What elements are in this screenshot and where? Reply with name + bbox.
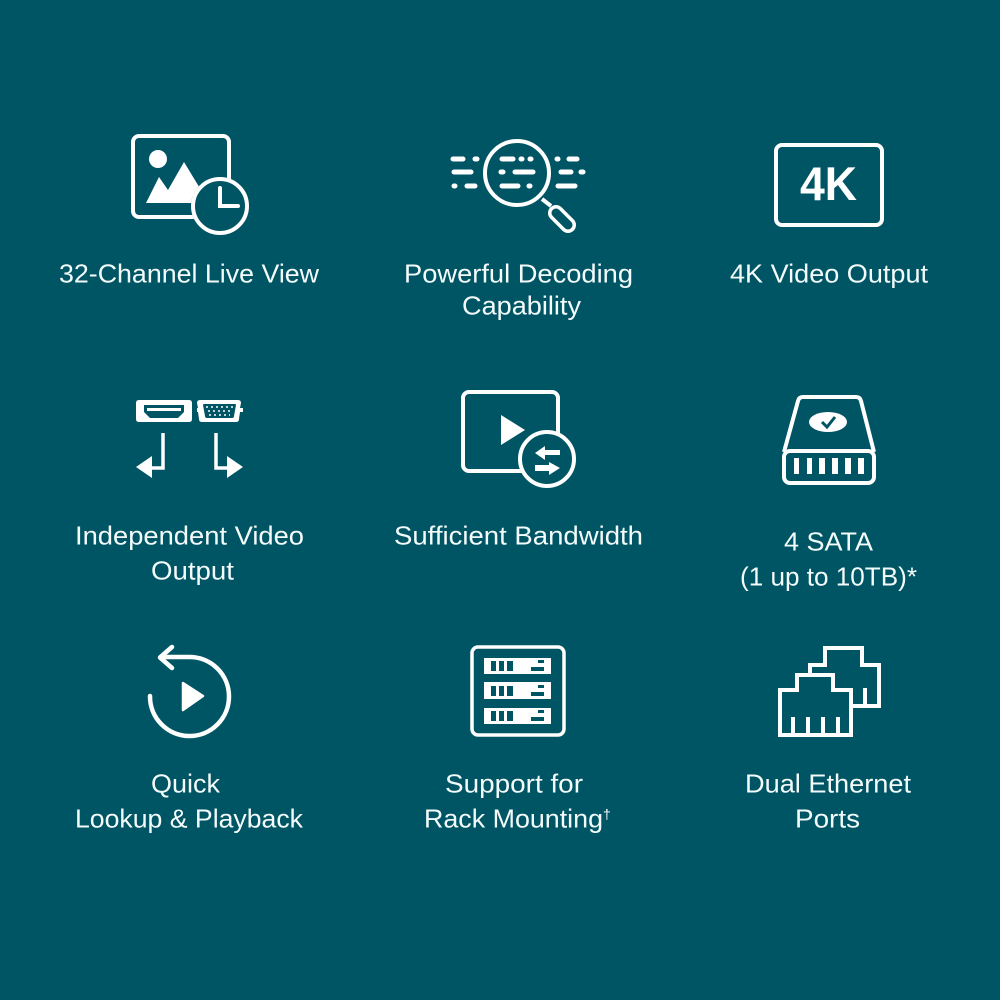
- icon: 4K screen: 4K: [800, 157, 857, 210]
- feature: 4 SATA: [740, 397, 917, 592]
- icon: two RJ45 connectors: [780, 648, 879, 735]
- label: Independent Video: [75, 520, 304, 550]
- feature: 32-Channel Live View: [59, 136, 319, 288]
- label: Sufficient Bandwidth: [394, 520, 643, 550]
- label line two: Lookup & Playback: [75, 804, 304, 834]
- label: 4 SATA: [784, 526, 874, 556]
- feature: Support for Rack Mounting: [424, 647, 611, 834]
- icon: replay arrow with play triangle: [150, 647, 229, 736]
- icon: magnifier over code lines: [453, 141, 583, 225]
- feature: Independent Video Output: [75, 400, 304, 586]
- icon: video with transfer arrows: [463, 392, 576, 488]
- feature: Sufficient Bandwidth: [394, 392, 643, 550]
- feature: Dual Ethernet Ports: [745, 648, 912, 834]
- label line two: (1 up to 10TB)*: [740, 562, 917, 592]
- icon: 4K screen: [776, 145, 882, 225]
- feature: Powerful Decoding Capability: [404, 141, 633, 320]
- feature: 4K Video Output: [730, 145, 929, 288]
- icon: HDMI and VGA ports with arrows: [136, 400, 243, 478]
- label line two: Ports: [795, 804, 860, 834]
- icon: server rack: [472, 647, 564, 735]
- label: Support for: [445, 768, 583, 798]
- label: 32-Channel Live View: [59, 258, 319, 288]
- icon: image with clock: [133, 136, 249, 235]
- label line two: Output: [151, 556, 235, 586]
- label: Quick: [151, 768, 221, 798]
- label: Powerful Decoding: [404, 258, 633, 288]
- label: 4K Video Output: [730, 258, 929, 288]
- feature: Quick Lookup & Playback: [75, 647, 304, 834]
- label: Dual Ethernet: [745, 768, 912, 798]
- dagger mark: †: [603, 806, 611, 822]
- label line two: Rack Mounting: [424, 804, 603, 834]
- icon: hard drive: [784, 397, 874, 483]
- label line two: Capability: [462, 290, 581, 320]
